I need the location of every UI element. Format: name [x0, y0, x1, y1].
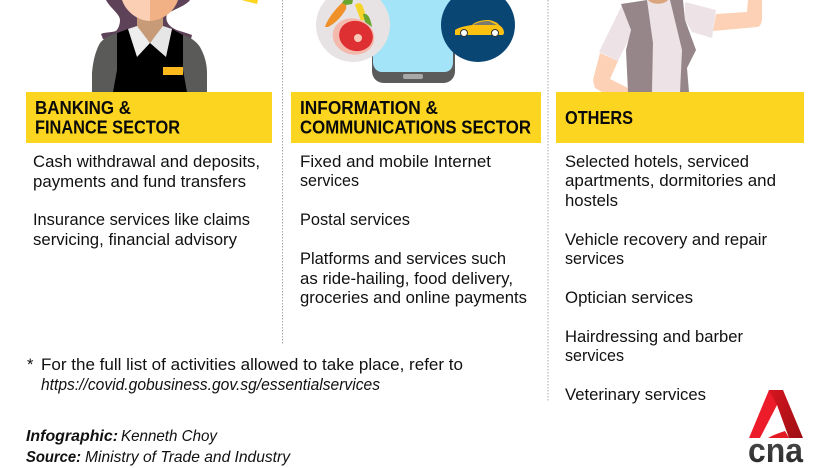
- text block: banking services: payments and fund transfers: [33, 173, 246, 191]
- text block: other services: services: [565, 250, 624, 268]
- panel: banking and finance heading: BANKING &: [35, 98, 131, 118]
- text block: other services: hostels: [565, 192, 618, 210]
- text block: banking services: Cash withdrawal and deposits,: [33, 153, 260, 171]
- credits: Source:: [26, 449, 81, 466]
- credits: Infographic:: [26, 428, 118, 445]
- panel: banking and finance heading: [26, 92, 272, 143]
- icon: woman in grey vest illustration: [593, 0, 762, 92]
- text block: information and communications services: Fixed and mobile Internet: [300, 153, 491, 171]
- panel: information and communications heading: COMMUNICATIONS SECTOR: [300, 118, 531, 138]
- text block: other services: [565, 153, 776, 404]
- text block: other services: Optician services: [565, 289, 693, 307]
- text block: information and communications services: [300, 153, 527, 307]
- panel: information and communications heading: [291, 92, 541, 143]
- text block: other services: Veterinary services: [565, 386, 706, 404]
- footnote: *: [27, 356, 34, 374]
- panel: banking and finance heading: FINANCE SECTOR: [35, 118, 180, 138]
- panel: others heading: OTHERS: [565, 108, 633, 128]
- icon: bank teller illustration: [92, 0, 258, 92]
- text block: banking services: Insurance services like claims: [33, 211, 250, 229]
- icon: food circle: [316, 0, 390, 62]
- credits: Kenneth Choy: [121, 428, 218, 445]
- text block: other services: services: [565, 347, 624, 365]
- text block: other services: Vehicle recovery and repair: [565, 231, 767, 249]
- footnote: For the full list of activities allowed to take place, refer to: [41, 356, 463, 374]
- panel: others heading: [556, 92, 804, 143]
- text block: other services: Hairdressing and barber: [565, 328, 744, 346]
- icon: CNA logo: [748, 390, 804, 468]
- icon: car circle: [441, 0, 515, 62]
- footnote: [27, 356, 463, 394]
- text block: banking services: [33, 153, 260, 249]
- text block: other services: Selected hotels, serviced: [565, 153, 749, 171]
- text block: information and communications services: Platforms and services such: [300, 250, 506, 268]
- text block: information and communications services: services: [300, 172, 359, 190]
- icon: smartphone with delivery and ride-hailing circles: [316, 0, 515, 83]
- text block: information and communications services: Postal services: [300, 211, 410, 229]
- text block: information and communications services: as ride-hailing, food delivery,: [300, 270, 513, 288]
- credits: Ministry of Trade and Industry: [85, 449, 291, 466]
- panel: information and communications heading: INFORMATION &: [300, 98, 438, 118]
- text block: other services: apartments, dormitories and: [565, 172, 776, 190]
- text block: banking services: servicing, financial advisory: [33, 231, 238, 249]
- footnote: https://covid.gobusiness.gov.sg/essentialservices: [41, 376, 380, 394]
- credits: [26, 428, 291, 466]
- text block: information and communications services: groceries and online payments: [300, 289, 527, 307]
